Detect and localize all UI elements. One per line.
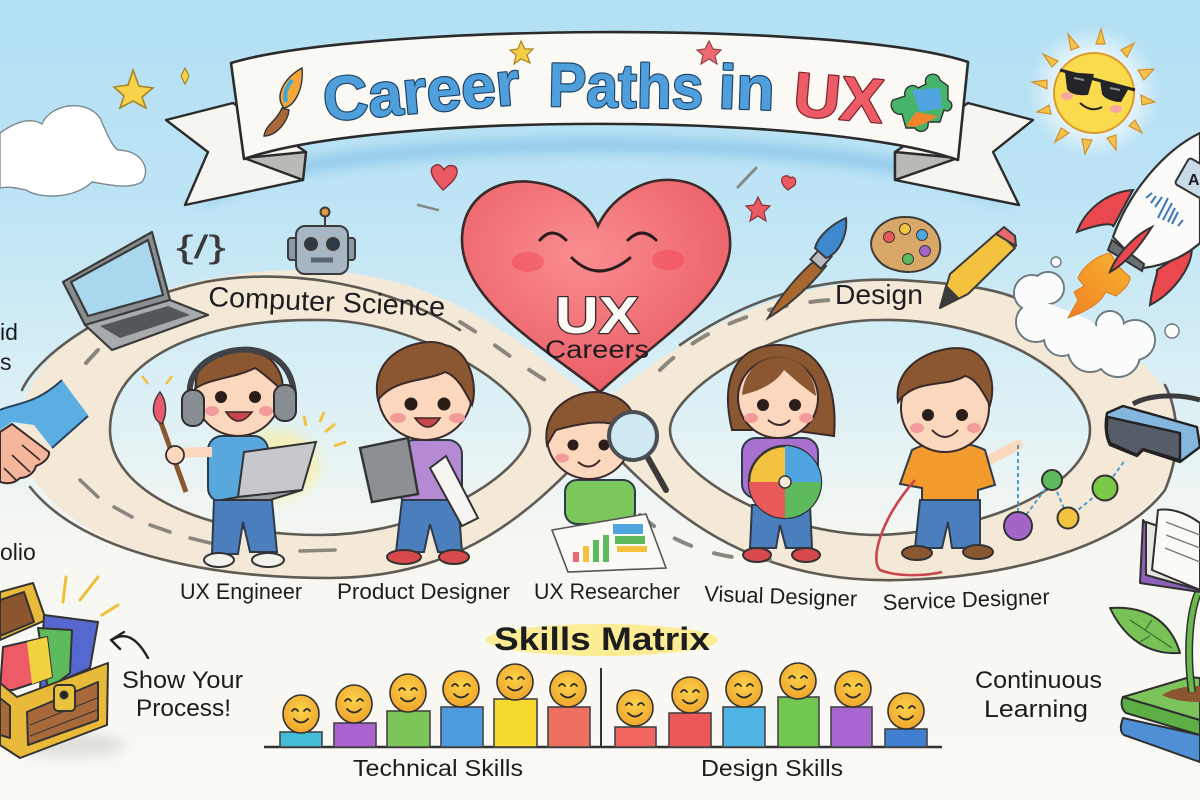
rocket launch <box>1014 133 1200 377</box>
text: Show Your Process: Show Your <box>122 667 243 694</box>
labels: careers: UX Researcher <box>534 579 680 604</box>
label: Design Skills: Design Skills <box>701 755 843 781</box>
text: Continuous Learning: Continuous <box>975 667 1102 694</box>
handshake: left <box>0 380 88 483</box>
sun with sunglasses <box>1028 26 1160 158</box>
ribbon tail: left <box>166 103 306 205</box>
infinity road <box>20 270 1180 580</box>
cropped label: hybrid roles: id <box>0 319 18 345</box>
ribbon tail: right <box>895 103 1033 205</box>
flame <box>1068 253 1130 318</box>
title text: Paths <box>548 51 704 123</box>
heart: UX Careers <box>462 180 730 392</box>
journey network <box>1004 445 1125 540</box>
text: UX: UX <box>555 287 639 345</box>
text: Show Your Process <box>122 667 243 722</box>
title text: Career <box>320 49 522 135</box>
labels: careers: Visual Designer <box>704 581 858 611</box>
icon: paintbrush <box>264 68 302 136</box>
cropped label: hybrid roles: s <box>0 349 12 375</box>
banner shadow <box>190 138 1015 212</box>
cropped label: hybrid roles <box>0 319 18 375</box>
label: Technical Skills: Technical Skills <box>353 755 523 781</box>
title banner <box>231 32 968 160</box>
AI chip: A <box>1188 172 1200 189</box>
heart accents and stars <box>418 165 796 221</box>
red cord <box>876 480 942 575</box>
icon: laptop <box>63 232 208 350</box>
treasure chest portfolio <box>0 577 125 758</box>
cropped label: portfolio: olio <box>0 539 36 565</box>
sparkle: small yellow <box>181 68 189 84</box>
sound wave <box>1146 193 1183 226</box>
icon: code braces: {/} <box>176 229 227 265</box>
icon: robot <box>288 208 355 274</box>
character: Visual Designer <box>728 345 835 562</box>
report paper <box>552 514 666 572</box>
icon: VR headset <box>1106 396 1200 462</box>
text: Continuous Learning <box>975 667 1102 723</box>
text: Continuous Learning: Learning <box>984 696 1088 723</box>
character: Product Designer <box>360 342 478 564</box>
label: Computer Science: Computer Science <box>208 281 446 322</box>
character: Service Designer <box>876 348 1125 575</box>
skills matrix heading: Skills Matrix <box>494 621 710 657</box>
tablet <box>360 438 418 502</box>
arrow: to chest <box>111 632 148 658</box>
character: UX Engineer <box>142 350 346 567</box>
books, plant and open book <box>1110 510 1200 762</box>
magnifier <box>609 412 666 490</box>
icon: palette <box>871 217 940 272</box>
title text <box>320 49 886 137</box>
banner stars <box>510 41 533 64</box>
title text: UX <box>791 60 886 137</box>
text: Careers: Careers <box>545 336 649 364</box>
title text: in <box>718 53 776 124</box>
labels: careers <box>180 579 1050 615</box>
star: yellow left <box>114 70 153 108</box>
glow <box>230 430 320 500</box>
icon: pencil <box>940 227 1016 308</box>
fins and body <box>1077 190 1133 232</box>
character: UX Researcher <box>546 392 666 572</box>
AI chip <box>1175 158 1200 198</box>
skills matrix chart <box>264 663 942 781</box>
icon: puzzle piece <box>891 74 952 131</box>
label: Design: Design <box>835 279 923 310</box>
color wheel <box>749 446 821 518</box>
labels: careers: Product Designer <box>337 579 510 604</box>
labels: careers: UX Engineer <box>180 579 302 604</box>
smoke cloud <box>1014 257 1179 377</box>
scroll <box>430 456 478 526</box>
icon: paintbrush large <box>768 218 846 318</box>
labels: careers: Service Designer <box>882 584 1050 615</box>
text: Show Your Process: Process! <box>136 695 231 722</box>
cloud: left <box>0 106 146 196</box>
